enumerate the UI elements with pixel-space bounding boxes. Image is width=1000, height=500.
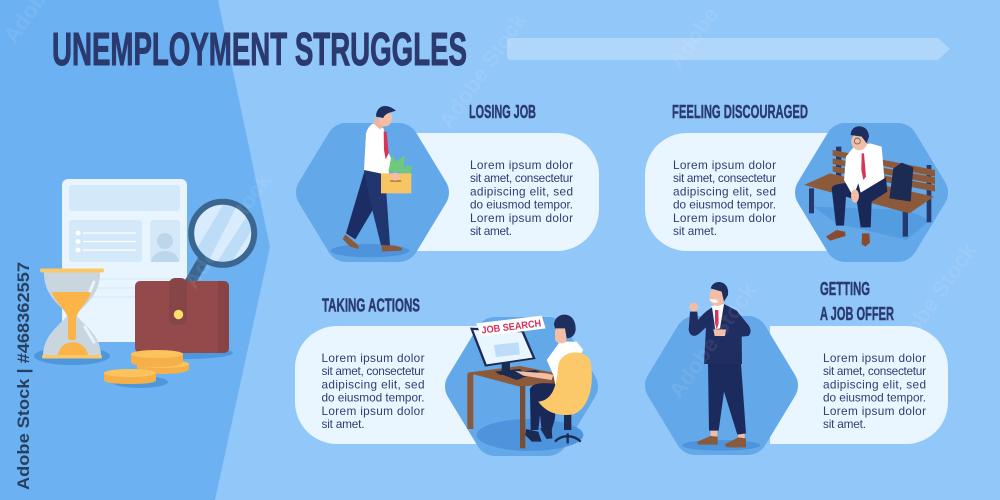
text block xyxy=(823,351,926,431)
watermarks: Adobe Stock xyxy=(434,8,532,133)
heading: A JOB OFFER xyxy=(820,303,894,324)
watermarks: Adobe Stock xyxy=(884,238,982,363)
panel: getting a job offer xyxy=(665,278,948,451)
heading: GETTING xyxy=(820,278,870,299)
arrow: header decoration xyxy=(507,38,950,60)
text block: do eiusmod tempor. xyxy=(673,198,776,212)
card xyxy=(295,326,480,444)
icon: wallet xyxy=(135,278,233,359)
watermarks: Adobe xyxy=(664,2,723,73)
card xyxy=(770,326,948,444)
panel: losing job xyxy=(316,101,599,257)
watermarks: Adobe Stock xyxy=(179,168,277,293)
icon: hourglass xyxy=(34,268,110,365)
title: UNEMPLOYMENT STRUGGLES xyxy=(52,23,467,75)
panel: taking actions xyxy=(295,294,592,451)
text block: Lorem ipsum dolor xyxy=(673,158,776,172)
text block: Lorem ipsum dolor xyxy=(823,404,926,418)
icon: magnifying glass xyxy=(189,200,258,284)
text block: do eiusmod tempor. xyxy=(470,198,573,212)
hexagon xyxy=(665,336,778,435)
text block: adipiscing elit, sed xyxy=(470,184,573,198)
heading: LOSING JOB xyxy=(469,101,536,122)
text block xyxy=(673,158,776,238)
hexagon xyxy=(465,337,578,436)
panel: feeling discouraged xyxy=(645,101,935,251)
text block: Lorem ipsum dolor xyxy=(322,404,425,418)
text block xyxy=(470,158,573,238)
watermarks: Adobe Stock xyxy=(664,278,762,403)
figure: man carrying box xyxy=(331,106,412,257)
card xyxy=(645,133,830,251)
heading: TAKING ACTIONS xyxy=(322,294,420,316)
text block: Lorem ipsum dolor xyxy=(470,211,573,225)
text block: sit amet. xyxy=(322,417,364,431)
figure: person at computer xyxy=(467,315,592,451)
text block: adipiscing elit, sed xyxy=(823,377,926,391)
search banner: JOB SEARCH xyxy=(481,318,542,337)
text block: sit amet, consectetur xyxy=(823,364,926,378)
text block: sit amet. xyxy=(823,417,866,431)
text block: adipiscing elit, sed xyxy=(673,184,776,198)
text block: Lorem ipsum dolor xyxy=(673,211,776,225)
text block: sit amet. xyxy=(470,224,512,238)
icon: coins xyxy=(104,350,189,388)
hexagon xyxy=(815,143,928,242)
figure: happy man in suit xyxy=(682,282,760,451)
watermarks xyxy=(0,0,982,403)
text block: Lorem ipsum dolor xyxy=(322,351,425,365)
text block: adipiscing elit, sed xyxy=(322,377,424,391)
text block: sit amet, consectetur xyxy=(322,364,425,378)
text block: Lorem ipsum dolor xyxy=(470,158,573,172)
text block: do eiusmod tempor. xyxy=(823,391,926,405)
stock id label: Adobe Stock | #468362557 xyxy=(14,262,33,490)
heading xyxy=(820,278,894,324)
text block: sit amet, consectetur xyxy=(470,171,573,185)
hexagon xyxy=(316,143,429,242)
icon: resume document xyxy=(62,179,187,342)
panel: left illustration background xyxy=(0,0,270,500)
heading: FEELING DISCOURAGED xyxy=(672,101,808,122)
text block: sit amet, consectetur xyxy=(673,171,776,185)
illustration: job search still life xyxy=(34,179,258,388)
text block: Lorem ipsum dolor xyxy=(823,351,926,365)
card xyxy=(400,133,599,251)
figure: man on bench xyxy=(804,126,935,247)
text block: do eiusmod tempor. xyxy=(322,391,424,405)
text block: sit amet. xyxy=(673,224,717,238)
text block xyxy=(322,351,425,431)
